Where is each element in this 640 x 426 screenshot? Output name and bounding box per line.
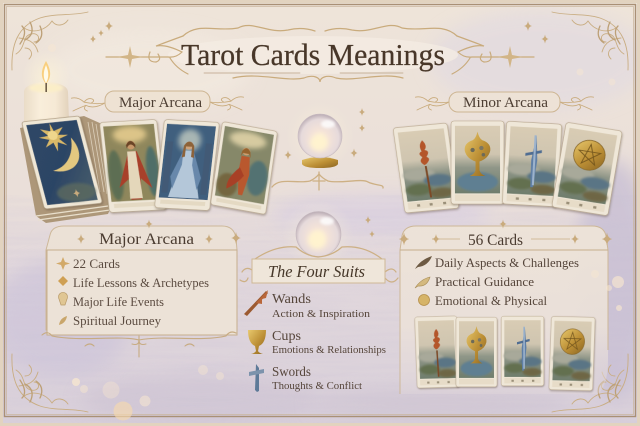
label: Major Arcana: Major Arcana	[119, 95, 202, 111]
list: major arcana points	[56, 256, 209, 328]
title ornament	[106, 25, 534, 82]
mini card: pentacle	[549, 316, 595, 391]
major card: The Sun Maiden	[210, 122, 278, 214]
crystal ball: top	[286, 102, 354, 170]
title star left	[117, 46, 143, 68]
label: Major Arcana	[71, 91, 244, 112]
major card: The High Priestess	[154, 119, 220, 211]
panel: Major Arcana	[42, 220, 241, 357]
list: minor arcana points: Daily Aspects & Challenges	[435, 255, 579, 270]
header sparkles	[77, 220, 241, 244]
list: minor arcana points: Emotional & Physical	[435, 293, 547, 308]
title star right	[497, 46, 523, 68]
mini card: wand	[415, 316, 459, 388]
list: major arcana points: Major Life Events	[73, 294, 164, 309]
title: Tarot Cards Meanings	[181, 37, 445, 72]
label: Minor Arcana: Minor Arcana	[463, 95, 548, 111]
suit list	[244, 290, 386, 392]
corner ornament: top right	[552, 12, 628, 70]
icon: leaf	[415, 277, 430, 288]
suit: cups	[248, 329, 386, 356]
crystal ball: lower	[282, 200, 354, 268]
panel heading: 56 Cards	[468, 232, 523, 249]
suit: swords: Thoughts & Conflict	[272, 380, 362, 392]
header ornaments	[399, 220, 612, 246]
corner ornament: top left	[12, 12, 88, 70]
icon: coin	[418, 294, 430, 306]
list: minor arcana points	[415, 255, 579, 308]
suit: cups: Cups	[272, 329, 301, 344]
icon: bulb	[59, 292, 68, 305]
decorative sparkles	[90, 21, 549, 238]
list: major arcana points: Spiritual Journey	[73, 313, 161, 328]
tarot deck	[20, 116, 112, 223]
major card: The Magician	[100, 119, 166, 213]
minor card: sword	[502, 121, 562, 207]
panel footer ornament	[42, 332, 236, 357]
corner ornament: bottom left	[12, 354, 88, 412]
icon: diamond	[58, 276, 68, 286]
suit: wands	[244, 290, 371, 320]
list: major arcana points: 22 Cards	[73, 256, 120, 271]
candle	[22, 50, 70, 126]
icon: quill	[415, 256, 432, 269]
panel heading: Major Arcana	[99, 231, 194, 248]
suit: swords: Swords	[272, 365, 311, 380]
label: Minor Arcana	[415, 92, 594, 112]
suit: swords	[249, 364, 362, 392]
minor card: pentacle	[552, 122, 622, 216]
corner ornament: bottom right	[552, 354, 628, 412]
minor card: wand	[393, 123, 459, 213]
icon: star	[56, 257, 70, 270]
flourish below crystal ball	[272, 172, 383, 190]
bokeh lights	[48, 44, 624, 420]
mini card: cup	[456, 317, 497, 387]
suit: wands: Action & Inspiration	[272, 308, 371, 320]
suit: wands: Wands	[272, 292, 311, 307]
list: major arcana points: Life Lessons & Archetypes	[73, 275, 209, 290]
panel: 56 Cards	[399, 220, 612, 394]
list: minor arcana points: Practical Guidance	[435, 274, 534, 289]
banner: The Four Suits: The Four Suits	[268, 262, 365, 281]
minor card: cup	[451, 121, 504, 204]
icon: feather	[59, 316, 67, 325]
suit: cups: Emotions & Relationships	[272, 344, 386, 356]
mini card: sword	[501, 316, 544, 386]
banner: The Four Suits	[240, 247, 398, 283]
